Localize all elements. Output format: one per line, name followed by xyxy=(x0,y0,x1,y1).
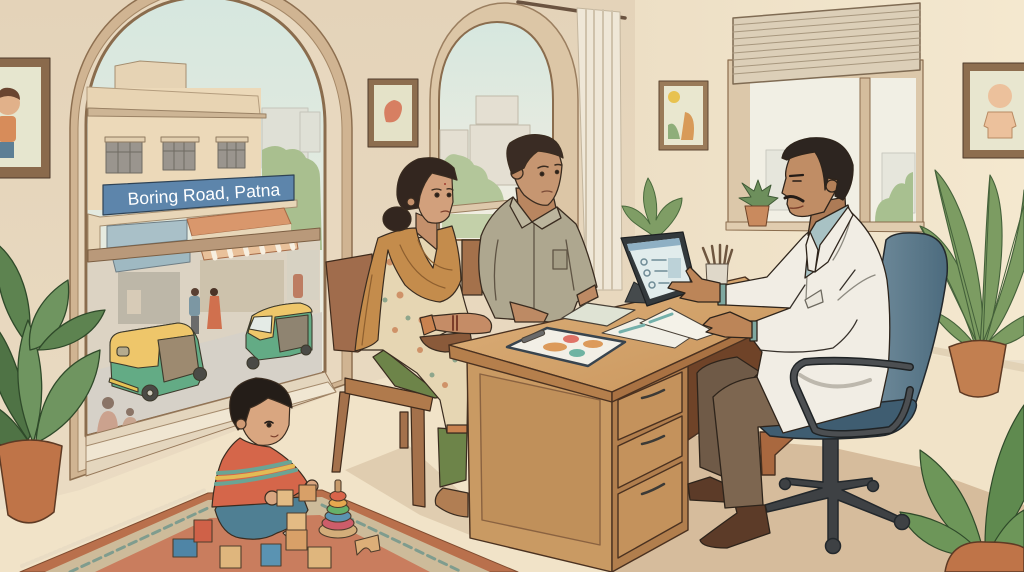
far leg frame xyxy=(760,432,800,475)
bottom right plant xyxy=(900,405,1024,572)
child's head xyxy=(240,395,290,445)
woman's kurta xyxy=(362,238,470,433)
trees xyxy=(442,154,504,207)
sign xyxy=(103,175,294,215)
woman's thigh xyxy=(373,350,443,398)
window mullion xyxy=(88,228,320,262)
doctor's front shoe xyxy=(700,505,770,548)
street xyxy=(88,312,322,434)
chair base xyxy=(765,437,910,554)
child's sweater xyxy=(212,438,307,507)
kurta hem xyxy=(447,425,467,433)
floor xyxy=(0,300,1024,572)
right floor plant xyxy=(920,170,1024,397)
doctor's hands xyxy=(668,267,720,302)
woman's shoe xyxy=(435,488,468,517)
upper shop row xyxy=(88,200,297,252)
sash xyxy=(440,196,553,214)
woman's head xyxy=(417,170,453,223)
blind xyxy=(733,3,920,84)
child's hands xyxy=(265,491,279,505)
tree outside xyxy=(875,172,913,222)
doctor's front leg xyxy=(713,377,785,508)
picture: wall ear drawing xyxy=(368,79,418,147)
report sheets xyxy=(602,318,697,348)
desk xyxy=(449,277,800,572)
trees xyxy=(262,146,322,250)
building xyxy=(87,61,266,210)
woman's hair bun xyxy=(383,207,411,231)
stacking rings xyxy=(319,480,357,538)
middle arched window xyxy=(430,3,578,250)
picture: wall baby xyxy=(963,63,1024,158)
woman's neck xyxy=(416,213,437,250)
tablet on stand xyxy=(621,232,697,306)
child's jeans xyxy=(215,497,308,539)
doctor's cuffs xyxy=(718,284,726,305)
distant buildings xyxy=(440,96,530,185)
lower shop row xyxy=(118,272,180,324)
window sill xyxy=(86,372,336,476)
auto rickshaw 1 xyxy=(109,323,206,401)
woman's purse on lap xyxy=(420,332,473,352)
desk top xyxy=(449,277,790,392)
distant buildings xyxy=(262,108,320,168)
tablet flat xyxy=(562,303,635,326)
floral dots on kurta xyxy=(382,258,458,388)
back wall xyxy=(0,0,640,500)
floor shadow under doctor xyxy=(612,435,1024,572)
curtain xyxy=(518,2,625,290)
desk under panel xyxy=(688,312,790,440)
man xyxy=(462,135,598,322)
woman xyxy=(355,158,492,517)
doctor's back shoe xyxy=(688,477,726,502)
doctor's back leg xyxy=(697,357,760,477)
man's neck xyxy=(516,188,556,222)
rug xyxy=(20,490,518,572)
left arched window xyxy=(70,0,352,480)
child xyxy=(212,378,318,539)
toy blocks and stacking rings xyxy=(173,480,380,568)
office chair xyxy=(760,233,947,554)
doctor's neck xyxy=(808,197,846,250)
doctor's lab coat xyxy=(725,207,890,433)
chair armrest xyxy=(794,361,910,434)
man's head xyxy=(512,150,562,205)
right wall xyxy=(635,0,1024,360)
plant behind couple xyxy=(622,178,682,235)
left floor plant xyxy=(0,243,105,523)
distant buildings xyxy=(766,150,915,213)
chair shadow on floor xyxy=(345,445,470,535)
clipboard xyxy=(507,328,625,366)
man's forearms xyxy=(510,302,548,322)
picture: left wall child xyxy=(0,58,50,178)
desk front panel xyxy=(467,358,612,572)
auto rickshaw 2 xyxy=(246,303,312,369)
glass and street scene xyxy=(86,0,325,436)
skirting xyxy=(925,345,1024,372)
striped awning xyxy=(200,236,298,260)
sign: Boring Road, Patna xyxy=(127,179,281,209)
man's shirt xyxy=(479,197,597,322)
chair backrest xyxy=(860,233,947,425)
woman's sleeve cuff and hands xyxy=(420,315,436,335)
pedestrians xyxy=(97,274,303,433)
doctor xyxy=(668,138,890,548)
picture: wall sun and figure xyxy=(659,81,708,150)
desk documents xyxy=(507,303,717,366)
woman's shin xyxy=(438,428,467,487)
right window xyxy=(726,3,924,232)
chair seat xyxy=(760,399,916,439)
doctor's collar and tie xyxy=(805,205,850,278)
woman's dupatta xyxy=(355,226,461,351)
desk drawers xyxy=(612,364,688,572)
woman's wooden chair xyxy=(326,254,433,507)
windowsill plant xyxy=(739,180,778,226)
pencil cup xyxy=(703,245,732,284)
man's chair back xyxy=(462,240,482,295)
lower pane shop backdrop xyxy=(88,238,320,372)
doctor's head xyxy=(782,150,840,216)
